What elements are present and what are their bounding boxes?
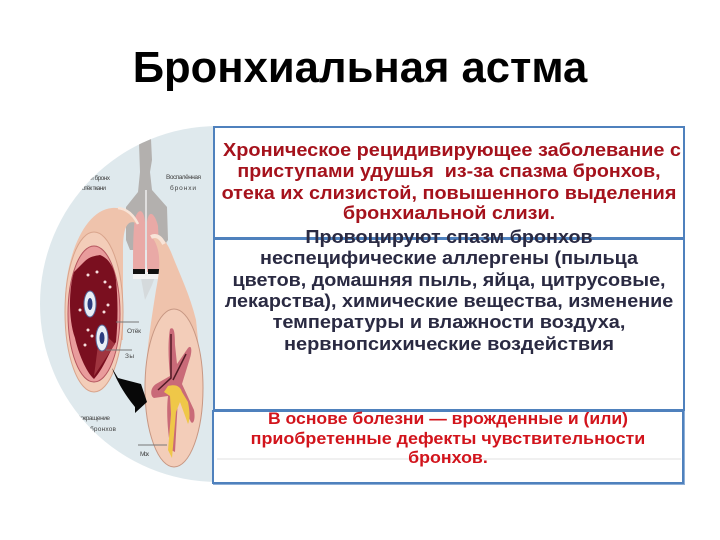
cause text: бронхов.	[408, 448, 488, 467]
panel: definition	[213, 126, 685, 239]
triggers text	[224, 227, 673, 354]
small caption marks: и отёк ткани	[78, 185, 106, 192]
bronchus tube, second section	[106, 236, 203, 467]
small caption marks: Мок	[140, 451, 149, 458]
icon: body silhouette with lungs	[126, 139, 168, 300]
definition text: Хроническое рецидивирующее заболевание с	[223, 140, 680, 160]
definition text	[222, 140, 680, 223]
black arrow	[112, 368, 147, 413]
triggers text: цветов, домашняя пыль, яйца, цитрусовые,	[232, 270, 666, 290]
triggers text: неспецифические аллергены (пыльца	[260, 248, 638, 268]
small caption marks: бронхов	[90, 425, 117, 433]
definition text: бронхиальной слизи.	[343, 203, 555, 223]
definition text: отека их слизистой, повышенного выделения	[222, 183, 676, 203]
background disc	[40, 126, 213, 482]
bronchus tube, first section	[65, 208, 138, 392]
constricted airway star	[151, 328, 195, 452]
small caption marks: Отёк	[127, 328, 141, 335]
airway openings	[84, 291, 96, 317]
small caption marks: ющий бронх	[78, 174, 111, 182]
small caption marks: бронхи	[170, 184, 196, 192]
small caption marks: Зы	[125, 353, 134, 360]
triggers text: нервнопсихические воздействия	[284, 334, 614, 354]
cause text	[251, 409, 645, 467]
small caption marks	[76, 174, 201, 458]
panel: cause	[212, 410, 684, 484]
triggers text: температуры и влажности воздуха,	[273, 312, 625, 332]
cause text: В основе болезни — врожденные и (или)	[268, 409, 628, 428]
triggers text: Провоцируют спазм бронхов	[305, 227, 593, 247]
title: Бронхиальная астма	[133, 44, 587, 92]
illustration: asthma airway in circle	[40, 126, 213, 482]
cause text: приобретенные дефекты чувствительности	[251, 429, 645, 448]
definition text: приступами удушья из-за спазма бронхов,	[237, 161, 661, 181]
small caption marks: Сокращение	[76, 415, 110, 422]
panel: triggers	[213, 238, 685, 411]
small caption marks: Воспалённая	[166, 174, 201, 181]
triggers text: лекарства), химические вещества, изменение	[225, 291, 673, 311]
